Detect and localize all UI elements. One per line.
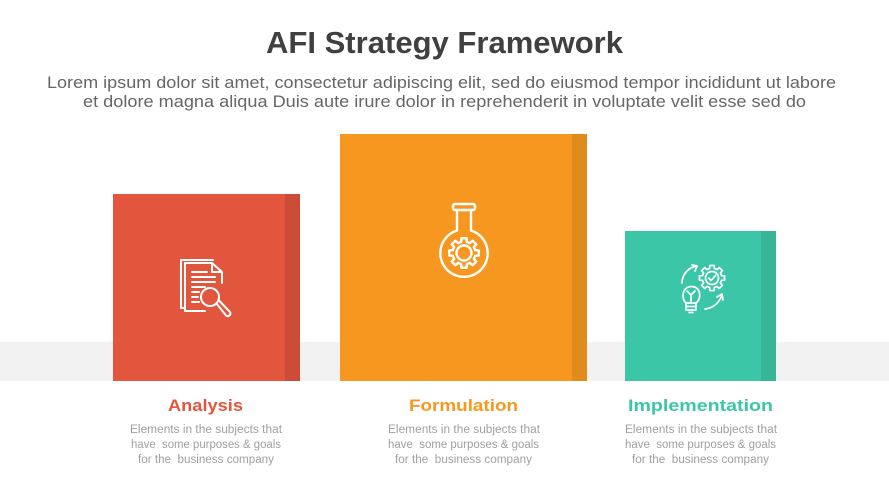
- label: analysis: Analysis: [168, 396, 243, 415]
- description: implementation: for the business company: [632, 454, 769, 466]
- description: implementation: Elements in the subjects that: [625, 424, 778, 436]
- title: AFI Strategy Framework: [266, 25, 624, 60]
- label: implementation: [625, 396, 778, 466]
- description: formulation: Elements in the subjects that: [388, 424, 541, 436]
- panel: formulation bar: [340, 134, 587, 381]
- description: analysis: Elements in the subjects that: [130, 424, 283, 436]
- label: formulation: Formulation: [409, 396, 518, 415]
- description: analysis: have some purposes & goals: [131, 439, 281, 451]
- description: formulation: have some purposes & goals: [388, 439, 539, 451]
- label: implementation: Implementation: [628, 396, 773, 415]
- intro text: Lorem ipsum dolor sit amet, consectetur adipiscing elit, sed do eiusmod tempor incididunt ut labore: [47, 74, 836, 92]
- icon: document with magnifier: [181, 260, 230, 316]
- intro text: [47, 74, 836, 111]
- label: analysis: [130, 396, 283, 466]
- panel: analysis bar: [113, 194, 300, 381]
- icon: gear, bulb and arrows: [682, 265, 725, 312]
- description: formulation: for the business company: [395, 454, 532, 466]
- description: implementation: have some purposes & goals: [625, 439, 776, 451]
- panel: implementation bar: [625, 231, 776, 381]
- description: analysis: for the business company: [138, 454, 274, 466]
- description: analysis: [130, 424, 283, 466]
- label: formulation: [388, 396, 541, 466]
- description: formulation: [388, 424, 541, 466]
- icon: flask with gear: [440, 204, 488, 277]
- description: implementation: [625, 424, 778, 466]
- intro text: et dolore magna aliqua Duis aute irure dolor in reprehenderit in voluptate velit esse sed do: [83, 93, 806, 111]
